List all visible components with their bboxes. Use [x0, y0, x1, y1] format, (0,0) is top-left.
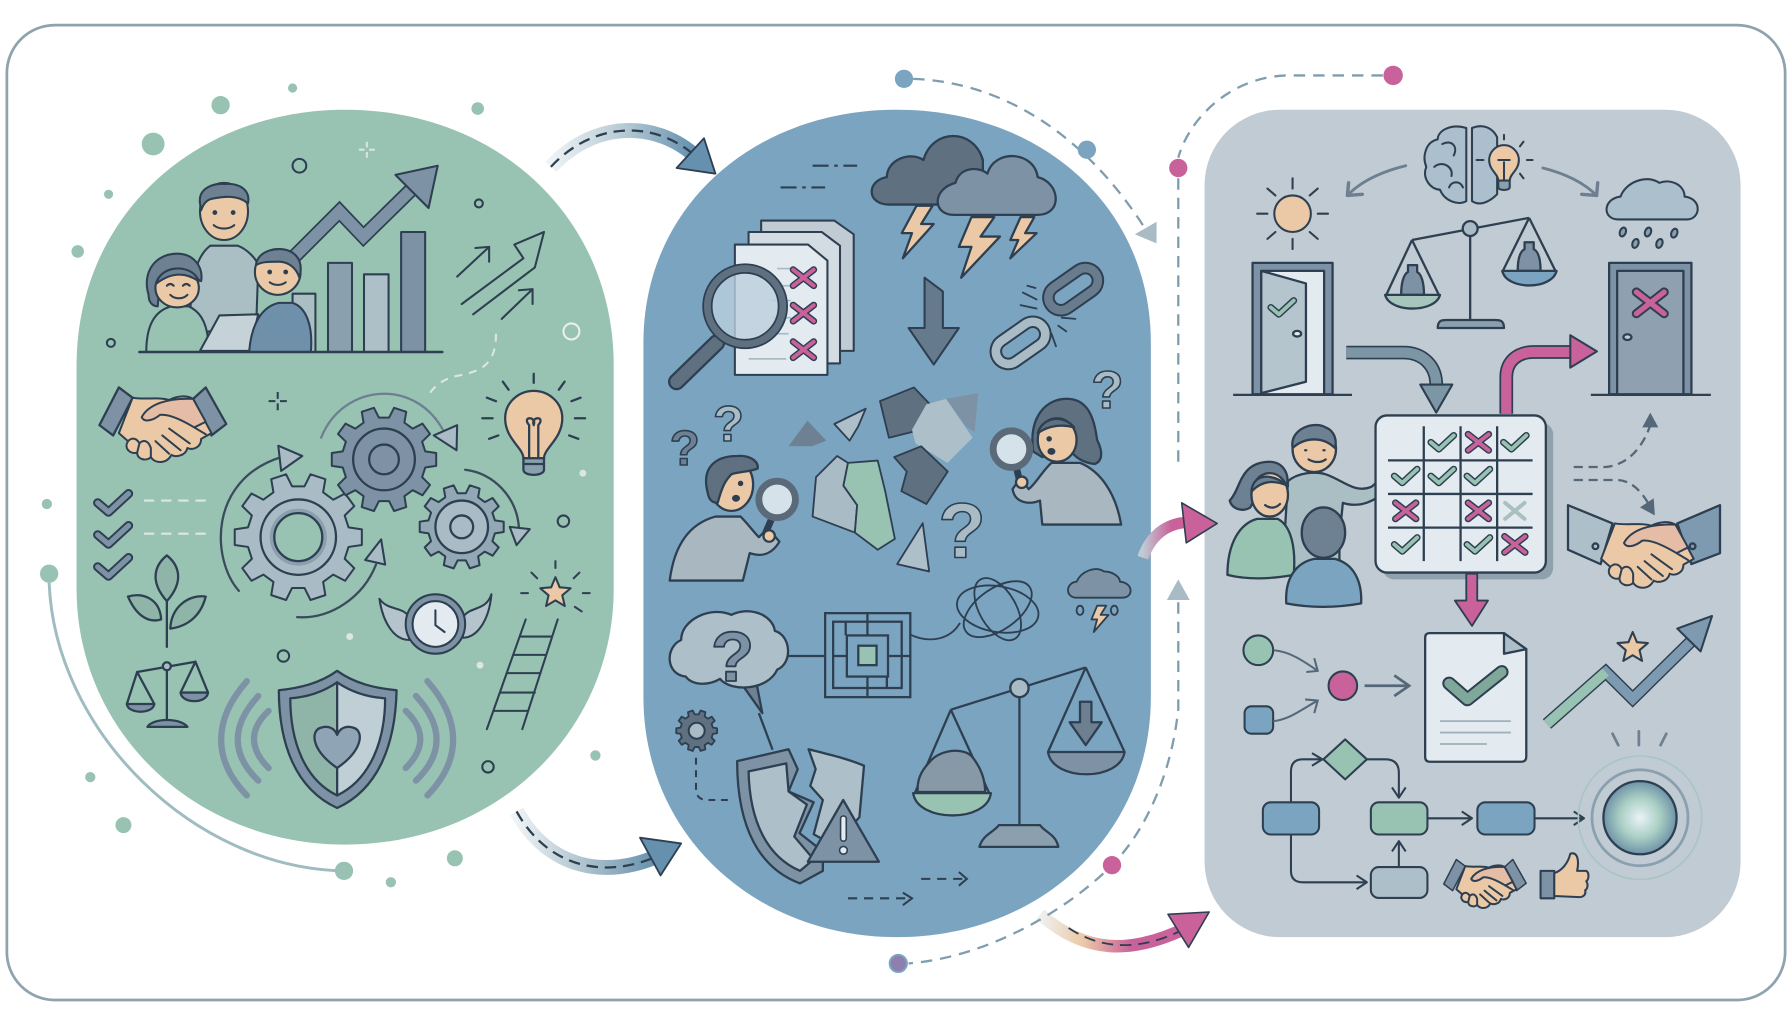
- thumbs up: [1541, 853, 1588, 898]
- icon: plant: [128, 555, 206, 647]
- dashed route: lower: [890, 579, 1190, 972]
- big handshake with sleeves: [1568, 505, 1720, 588]
- person with magnifier, left: [670, 456, 795, 581]
- balance of options: [1385, 218, 1557, 328]
- flow arrow: green to blue, top: [551, 130, 715, 174]
- dashed connector: [430, 334, 496, 393]
- small handshake: [1444, 859, 1526, 908]
- small gear with dashed link: [676, 711, 730, 800]
- panel: blue challenges: [643, 110, 1151, 937]
- diverging arrows: [1347, 166, 1598, 195]
- success trend arrow: [1547, 616, 1712, 724]
- icon: heart shield with waves: [221, 671, 453, 808]
- icon: light bulb: [482, 374, 585, 475]
- question marks: ?: [670, 422, 700, 476]
- broken shield with warning: [737, 749, 879, 883]
- question marks: ?: [1091, 361, 1124, 420]
- flow arrow: blue to grey, pink upper: [1143, 503, 1217, 558]
- icon: sun: [1257, 178, 1328, 249]
- icon: rain cloud: [1607, 179, 1698, 249]
- storm clouds with lightning: [872, 136, 1056, 278]
- icon: balance scale: [127, 662, 208, 727]
- question marks: [670, 361, 1124, 575]
- tangled thought: [910, 570, 1042, 648]
- brain with bulb: [1425, 126, 1533, 203]
- documents with magnifier: [677, 221, 854, 382]
- arrow: matrix to closed door: [1506, 335, 1597, 414]
- decorative satellite dots and curve around green panel: [40, 83, 601, 887]
- big unbalanced scale: [913, 667, 1125, 847]
- approved document: [1425, 633, 1526, 762]
- icon: rising arrows: [457, 232, 544, 319]
- broken shards: [789, 387, 978, 571]
- small circles and sparkles: [107, 142, 586, 773]
- small flow nodes: [1243, 635, 1409, 734]
- glowing goal orb: [1578, 731, 1702, 879]
- icon: closed door with x: [1591, 263, 1711, 395]
- confusion cloud: ?: [711, 618, 754, 697]
- flow arrow: green to blue, bottom: [517, 811, 681, 875]
- dashed arrows: [781, 166, 967, 905]
- broken chain: [991, 263, 1103, 369]
- dashed forking arrows: [1574, 413, 1658, 515]
- question marks: ?: [938, 489, 986, 575]
- icon: winged clock: [379, 594, 491, 654]
- panel: grey decisions: [1205, 110, 1741, 937]
- process flow chart: [1263, 739, 1584, 898]
- dashed route: top blue to arrowhead: [895, 70, 1157, 243]
- team and growth chart: [139, 166, 442, 352]
- question marks: ?: [713, 395, 744, 452]
- decision team: [1227, 425, 1386, 607]
- pink arrow down: [1455, 574, 1488, 626]
- person with magnifier, right: [993, 399, 1121, 525]
- flow arrow: blue to grey, pink lower: [1040, 912, 1209, 947]
- heavy down arrow: [909, 278, 959, 365]
- icon: handshake: [99, 387, 226, 462]
- maze: [825, 613, 910, 697]
- icon: open door: [1233, 263, 1352, 395]
- decision matrix: [1376, 415, 1553, 579]
- icon: gears with rotation arrows: [221, 394, 530, 617]
- panel: green foundation: [77, 110, 614, 845]
- small storm cloud: [1068, 569, 1131, 632]
- confusion cloud: [670, 611, 825, 750]
- icon: ladder and star: [487, 561, 590, 729]
- arrow: open door to matrix: [1346, 353, 1452, 413]
- dashed route: top pink: [1169, 66, 1403, 463]
- icon: checklist: [98, 494, 207, 576]
